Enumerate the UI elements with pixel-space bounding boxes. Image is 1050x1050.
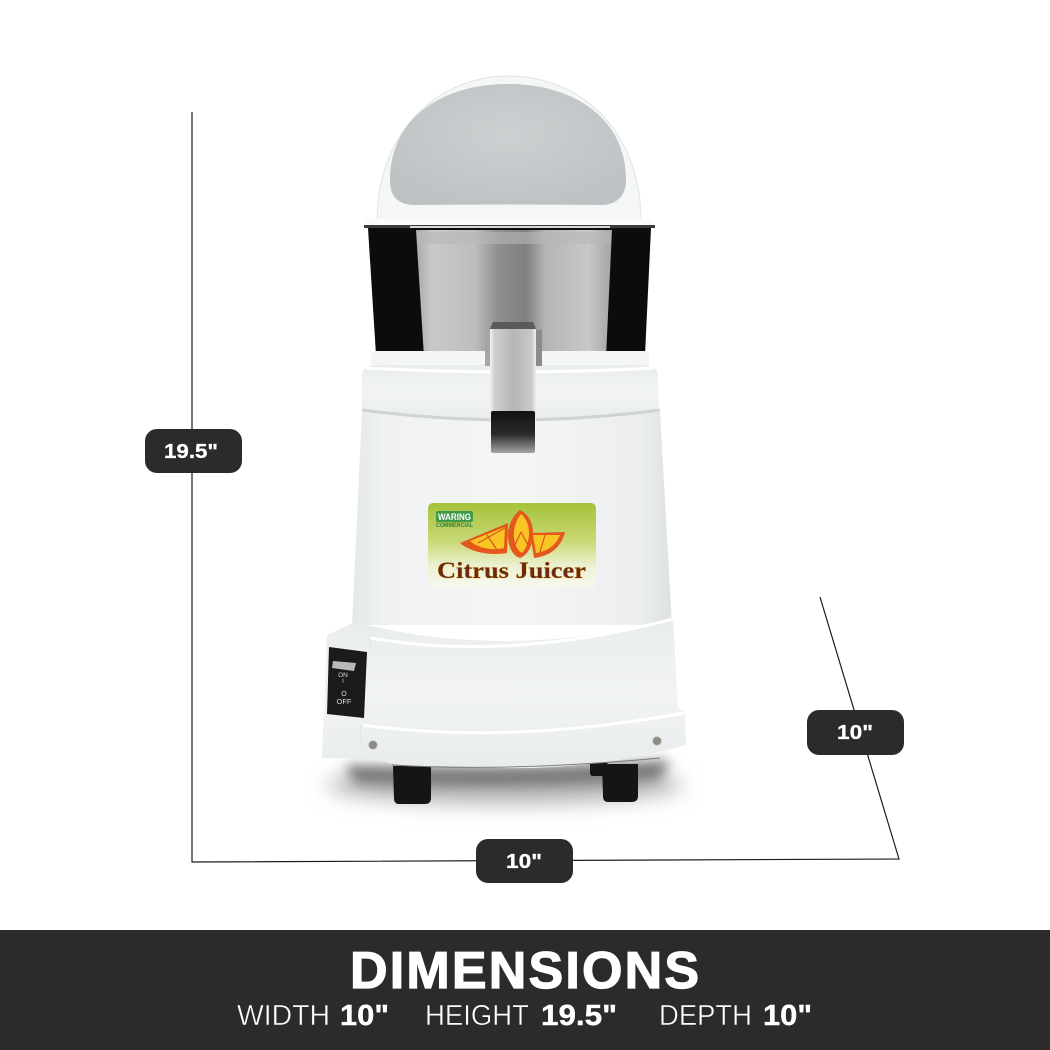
dimension lines xyxy=(192,112,899,862)
width pill xyxy=(476,839,573,883)
rocker switch: I xyxy=(342,679,344,685)
width spec: WIDTH xyxy=(237,1000,330,1032)
product label xyxy=(428,503,596,587)
depth spec: 10" xyxy=(763,1000,812,1032)
height spec: HEIGHT xyxy=(425,1000,529,1032)
height spec: 19.5" xyxy=(541,1000,617,1032)
collar xyxy=(362,351,660,421)
product label: Citrus Juicer xyxy=(437,558,586,583)
width pill: 10" xyxy=(506,850,542,873)
height pill: 19.5" xyxy=(164,440,218,463)
product label: WARING xyxy=(438,512,471,523)
rocker switch xyxy=(327,647,367,718)
rocker switch: O xyxy=(341,691,347,698)
width spec xyxy=(237,1000,389,1032)
width spec: 10" xyxy=(340,1000,389,1032)
waring logo xyxy=(436,511,473,522)
steel bowl xyxy=(364,225,655,357)
heading: DIMENSIONS xyxy=(350,942,699,1000)
footer band xyxy=(0,930,1050,1050)
orange slices xyxy=(460,523,508,554)
depth spec xyxy=(659,1000,812,1032)
screws xyxy=(368,740,378,750)
depth spec: DEPTH xyxy=(659,1000,752,1032)
lid dome xyxy=(364,76,654,226)
spout clip xyxy=(485,322,542,453)
floor shadow xyxy=(327,760,683,804)
rocker switch: ON xyxy=(338,672,348,679)
product label: COMMERCIAL xyxy=(436,523,473,529)
height spec xyxy=(425,1000,617,1032)
feet xyxy=(393,762,638,804)
body xyxy=(352,412,672,625)
depth pill xyxy=(807,710,904,755)
depth pill: 10" xyxy=(837,721,873,744)
height pill xyxy=(145,429,242,473)
rocker switch: OFF xyxy=(336,697,352,706)
base xyxy=(322,618,686,768)
product: citrus juicer xyxy=(322,76,686,804)
